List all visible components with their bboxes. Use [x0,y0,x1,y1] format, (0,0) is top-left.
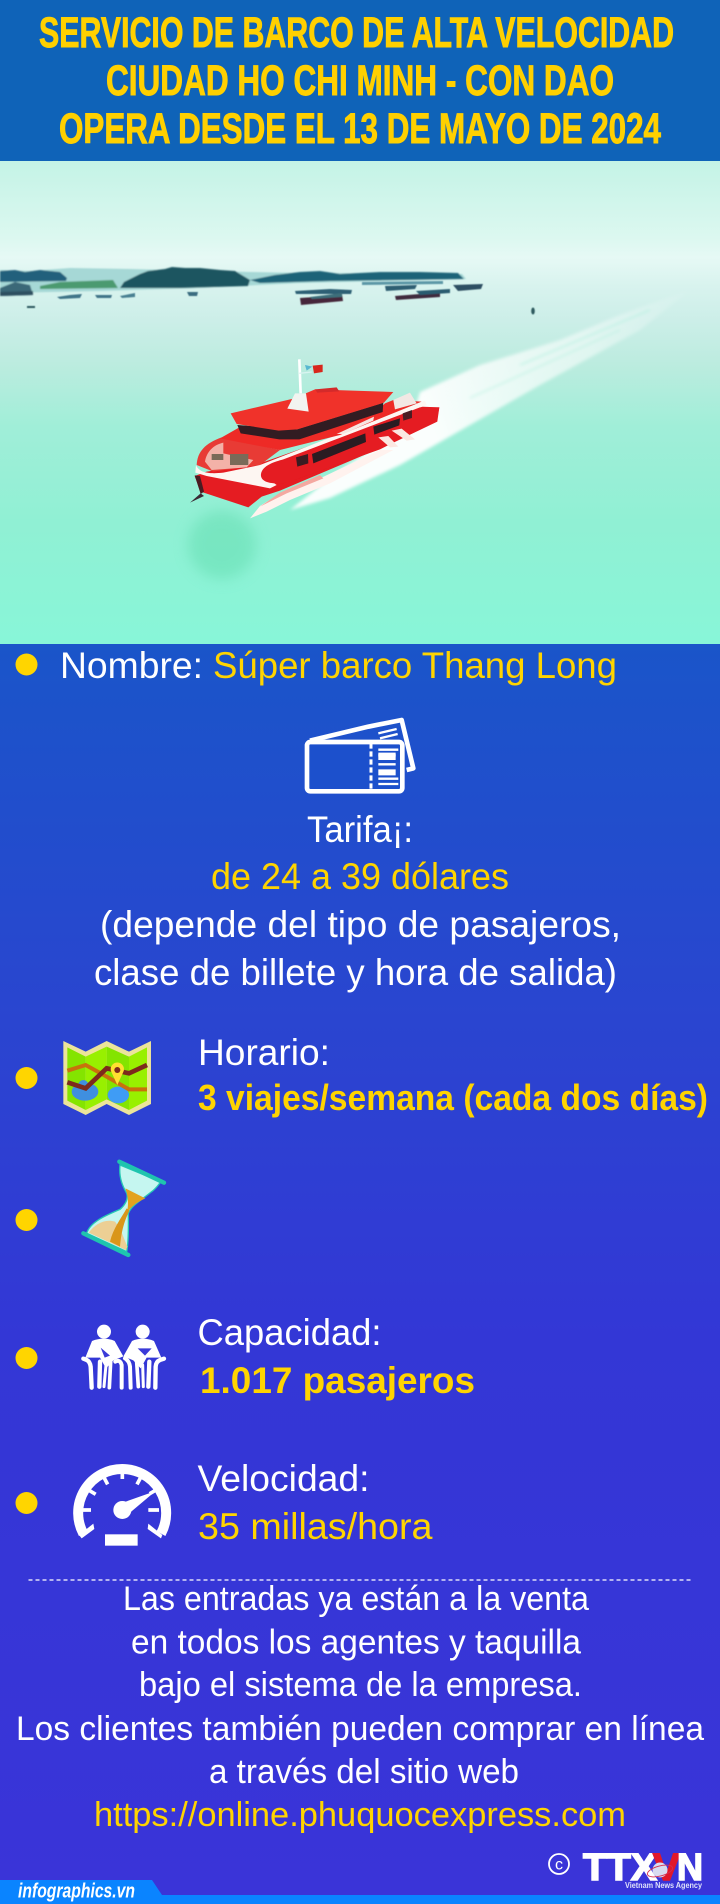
mid deck [220,400,422,450]
logo: TTXVN [549,1847,703,1890]
website link: https://online.phuquocexpress.com [94,1796,626,1834]
wordmark [583,1847,703,1889]
bullet [16,1347,38,1369]
section: name [16,645,617,686]
speed value: 35 millas/hora [198,1506,433,1547]
text block: ticket sales: Los clientes también pueden comprar en línea [16,1710,704,1748]
section: schedule [16,1032,708,1118]
text block: ticket sales: en todos los agentes y taquilla [131,1624,581,1662]
name label: Nombre: [60,645,203,686]
icon: speedometer [78,1468,166,1546]
radar dome [287,393,309,412]
fare note: (depende del tipo de pasajeros, [100,904,621,945]
title [39,9,674,153]
wake [290,306,658,511]
copyright symbol [549,1854,569,1874]
text block: ticket sales [16,1580,704,1834]
section: speed [16,1458,433,1547]
bullet [16,654,38,676]
schedule label: Horario: [198,1032,330,1073]
photo: high-speed ferry at sea [0,161,720,644]
fare value: de 24 a 39 dólares [211,856,509,897]
side windows [312,433,366,463]
icon: seated passengers [83,1325,164,1388]
swooshes [378,429,415,447]
icon: tickets [307,720,413,791]
wordmark: N [677,1847,703,1889]
mast and flag [299,359,301,393]
copyright symbol: c [555,1856,563,1874]
capacity value: 1.017 pasajeros [200,1360,475,1401]
roof [231,389,393,431]
panel: title banner [0,0,720,161]
fare note [94,904,621,993]
name value: Súper barco Thang Long [213,645,617,686]
white bow stripe [195,401,427,488]
red side blob [261,407,439,483]
fore deck [197,437,280,472]
capacity label: Capacidad: [198,1312,382,1353]
bullet [16,1492,38,1514]
tagline: Vietnam News Agency [625,1880,702,1890]
fare note: clase de billete y hora de salida) [94,952,617,993]
fare label: Tarifa¡: [307,809,413,850]
icon: hourglass [83,1162,164,1255]
upper dark windows [237,403,383,439]
wordmark: V [653,1847,681,1889]
text block: ticket sales: a través del sitio web [209,1753,519,1791]
ferry [190,359,439,518]
source label: infographics.vn [18,1880,135,1902]
ferry reflection [188,511,256,579]
panel: body background [0,644,720,1904]
globe [652,1862,668,1878]
section: capacity [16,1312,475,1401]
bullet [16,1209,38,1231]
text block: ticket sales: Las entradas ya están a la venta [123,1580,589,1618]
shoreline with trees [0,267,466,296]
speed label: Velocidad: [198,1458,370,1499]
section: duration [16,1162,164,1255]
section: fare [94,809,621,993]
text block: ticket sales: bajo el sistema de la empresa. [139,1666,582,1704]
anchored boats [27,281,535,314]
bullet [16,1067,38,1089]
lower hull [195,407,439,507]
icon: map [63,1041,151,1115]
spray [250,450,393,518]
footer strip [0,1880,720,1904]
wordmark: TTX [583,1847,658,1889]
